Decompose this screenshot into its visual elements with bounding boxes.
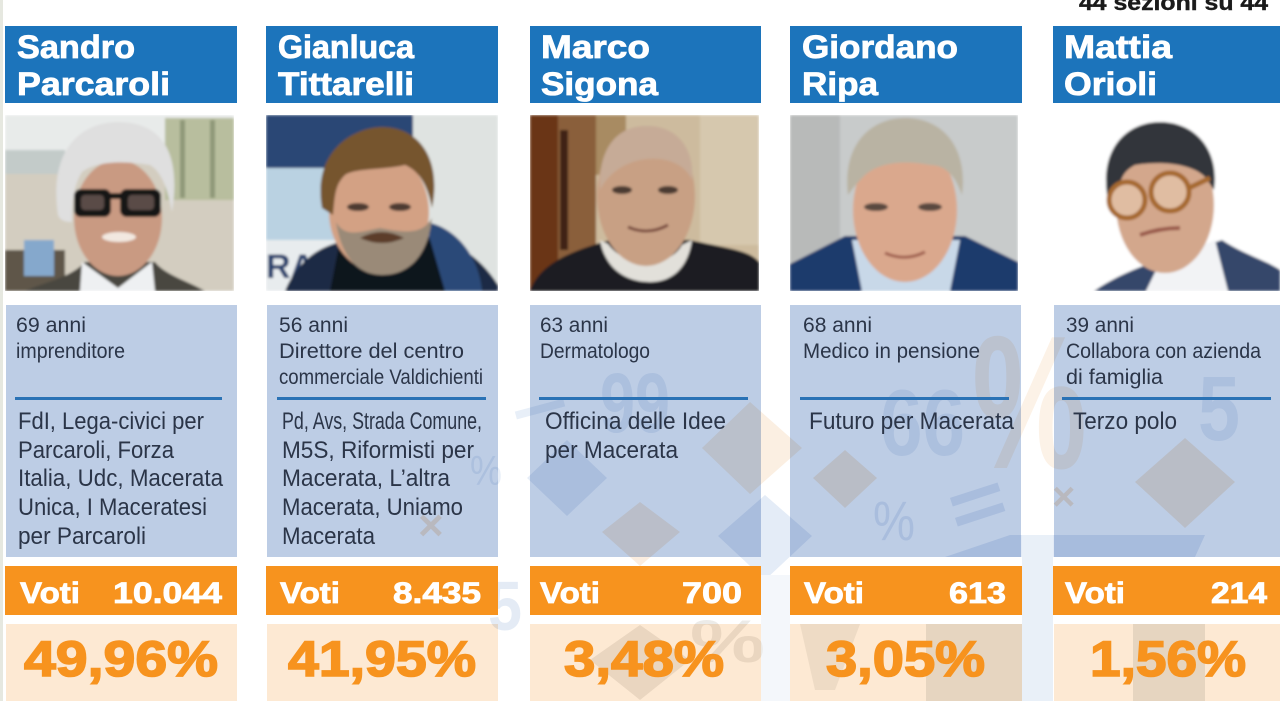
supporting lists: Macerata, L’altra <box>282 465 451 492</box>
votes bar <box>266 566 498 615</box>
age and job: commerciale Valdichienti <box>279 366 483 389</box>
supporting lists: Futuro per Macerata <box>809 408 1015 435</box>
info box <box>1054 305 1280 557</box>
supporting lists <box>18 408 224 550</box>
votes bar: 8.435 <box>393 577 481 610</box>
name header: Gianluca <box>278 29 414 65</box>
votes bar: Voti <box>280 577 340 610</box>
supporting lists: M5S, Riformisti per <box>282 437 474 464</box>
votes bar: 613 <box>949 577 1006 610</box>
age and job <box>803 314 980 363</box>
percentage: 49,96% <box>24 631 218 687</box>
supporting lists: Pd, Avs, Strada Comune, <box>282 408 482 435</box>
age and job: 39 anni <box>1066 314 1134 337</box>
name header: Marco <box>541 29 650 65</box>
percentage <box>6 624 237 701</box>
portrait <box>5 115 234 291</box>
portrait <box>1094 120 1280 291</box>
name header: Giordano <box>802 29 958 65</box>
percentage <box>530 624 761 701</box>
name header: Sigona <box>541 66 658 102</box>
supporting lists <box>545 408 726 464</box>
info box <box>530 305 761 557</box>
age and job: 69 anni <box>16 314 86 337</box>
supporting lists: per Macerata <box>545 437 679 464</box>
votes bar <box>1053 566 1280 615</box>
age and job: 68 anni <box>803 314 872 337</box>
infographic: election results for five candidates: 5 <box>1198 358 1240 460</box>
age and job: Medico in pensione <box>803 340 980 363</box>
supporting lists: Parcaroli, Forza <box>18 437 175 464</box>
infographic: election results for five candidates: % <box>972 297 1087 509</box>
name header: Parcaroli <box>17 66 170 102</box>
age and job <box>279 314 483 389</box>
info box <box>267 305 498 557</box>
name header: Tittarelli <box>278 66 414 102</box>
panel: candidate Sandro Parcaroli <box>5 26 237 701</box>
percentage: 3,05% <box>826 631 985 687</box>
votes bar: 10.044 <box>113 577 222 610</box>
percentage <box>790 624 1022 701</box>
supporting lists: Officina delle Idee <box>545 408 726 435</box>
age and job: imprenditore <box>16 340 125 363</box>
infographic: election results for five candidates: × <box>418 501 444 550</box>
votes bar <box>790 566 1022 615</box>
percentage: 41,95% <box>288 631 476 687</box>
votes bar: Voti <box>804 577 864 610</box>
infographic: election results for five candidates: % <box>873 489 915 552</box>
name header: Orioli <box>1064 66 1157 102</box>
votes bar: Voti <box>540 577 600 610</box>
supporting lists: Italia, Udc, Macerata <box>18 465 224 492</box>
supporting lists: FdI, Lega-civici per <box>18 408 204 435</box>
age and job: Direttore del centro <box>279 340 464 363</box>
info box <box>6 305 237 557</box>
age and job: 56 anni <box>279 314 348 337</box>
infographic: election results for five candidates: % <box>690 608 765 675</box>
infographic: election results for five candidates: × <box>1052 475 1075 519</box>
supporting lists: Macerata <box>282 523 376 550</box>
supporting lists: Unica, I Maceratesi <box>18 494 207 521</box>
votes bar: Voti <box>20 577 80 610</box>
age and job <box>540 314 650 363</box>
panel: candidate Mattia Orioli <box>1053 26 1280 701</box>
name header <box>1053 26 1280 103</box>
infographic: election results for five candidates: 5 <box>488 567 522 645</box>
name header <box>530 26 761 103</box>
age and job <box>16 314 125 363</box>
infographic: election results for five candidates: 99 <box>600 356 670 450</box>
portrait <box>266 115 498 291</box>
name header: Mattia <box>1064 29 1172 65</box>
supporting lists: Terzo polo <box>1073 408 1177 435</box>
percentage: 3,48% <box>564 631 724 687</box>
panel: candidate Marco Sigona <box>530 26 761 701</box>
percentage <box>1054 624 1280 701</box>
name header <box>790 26 1022 103</box>
percentage: 1,56% <box>1090 631 1246 687</box>
age and job: Dermatologo <box>540 340 650 363</box>
votes bar: 700 <box>682 577 742 610</box>
portrait <box>790 115 1018 291</box>
panel: candidate Gianluca Tittarelli <box>266 26 498 701</box>
votes bar <box>5 566 237 615</box>
supporting lists <box>282 408 482 550</box>
age and job: 63 anni <box>540 314 608 337</box>
name header <box>5 26 237 103</box>
name header: Sandro <box>17 29 135 65</box>
votes bar: Voti <box>1065 577 1125 610</box>
votes bar <box>530 566 761 615</box>
infographic: election results for five candidates: 66 <box>880 370 965 475</box>
panel: candidate Giordano Ripa <box>790 26 1022 701</box>
age and job <box>1066 314 1261 389</box>
percentage <box>267 624 498 701</box>
infographic: election results for five candidates: % <box>470 447 502 494</box>
portrait: RA <box>266 248 315 286</box>
age and job: Collabora con azienda <box>1066 340 1261 363</box>
age and job: di famiglia <box>1066 366 1163 389</box>
name header: Ripa <box>802 66 878 102</box>
votes bar: 214 <box>1211 577 1267 610</box>
supporting lists: per Parcaroli <box>18 523 146 550</box>
info box <box>790 305 1021 557</box>
supporting lists: Macerata, Uniamo <box>282 494 463 521</box>
portrait <box>530 115 759 291</box>
name header <box>266 26 498 103</box>
